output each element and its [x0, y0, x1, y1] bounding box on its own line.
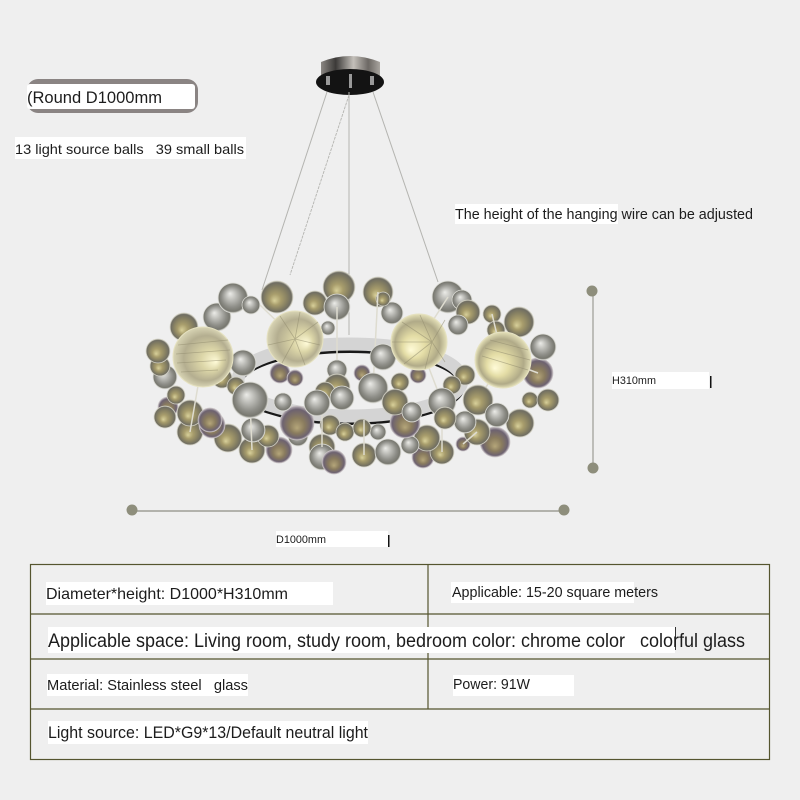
spec: applicable space and colour: Applicable space: Living room, study room, bedroom color: chrome color colorful glass	[48, 631, 745, 652]
model label pill	[27, 79, 198, 113]
spec: diameter and height	[46, 582, 333, 605]
table grid	[30, 564, 770, 760]
chrome ring	[238, 344, 462, 422]
spec: applicable area: Applicable: 15-20 square meters	[452, 585, 658, 601]
height dimension	[586, 286, 712, 474]
height dimension: H310mm	[612, 375, 656, 387]
suspension wires	[262, 92, 438, 335]
spec: power	[453, 675, 574, 696]
diameter dimension	[126, 504, 570, 547]
hanging wire note: The height of the hanging wire can be adjusted	[455, 207, 753, 223]
spec: diameter and height: Diameter*height: D1000*H310mm	[46, 586, 288, 603]
spec: power: Power: 91W	[453, 677, 530, 693]
ball count note	[15, 137, 246, 159]
spec: material: Material: Stainless steel glass	[47, 678, 248, 694]
lit light-source balls	[173, 311, 531, 388]
model label pill: (Round D1000mm	[27, 88, 162, 107]
ball count note: 13 light source balls 39 small balls	[15, 141, 244, 157]
specification table	[30, 564, 770, 760]
spec: light source: Light source: LED*G9*13/Default neutral light	[48, 724, 368, 742]
glass balls	[146, 271, 559, 474]
diameter dimension: D1000mm	[276, 534, 326, 546]
ceiling canopy	[316, 56, 384, 95]
chandelier illustration	[146, 56, 559, 474]
